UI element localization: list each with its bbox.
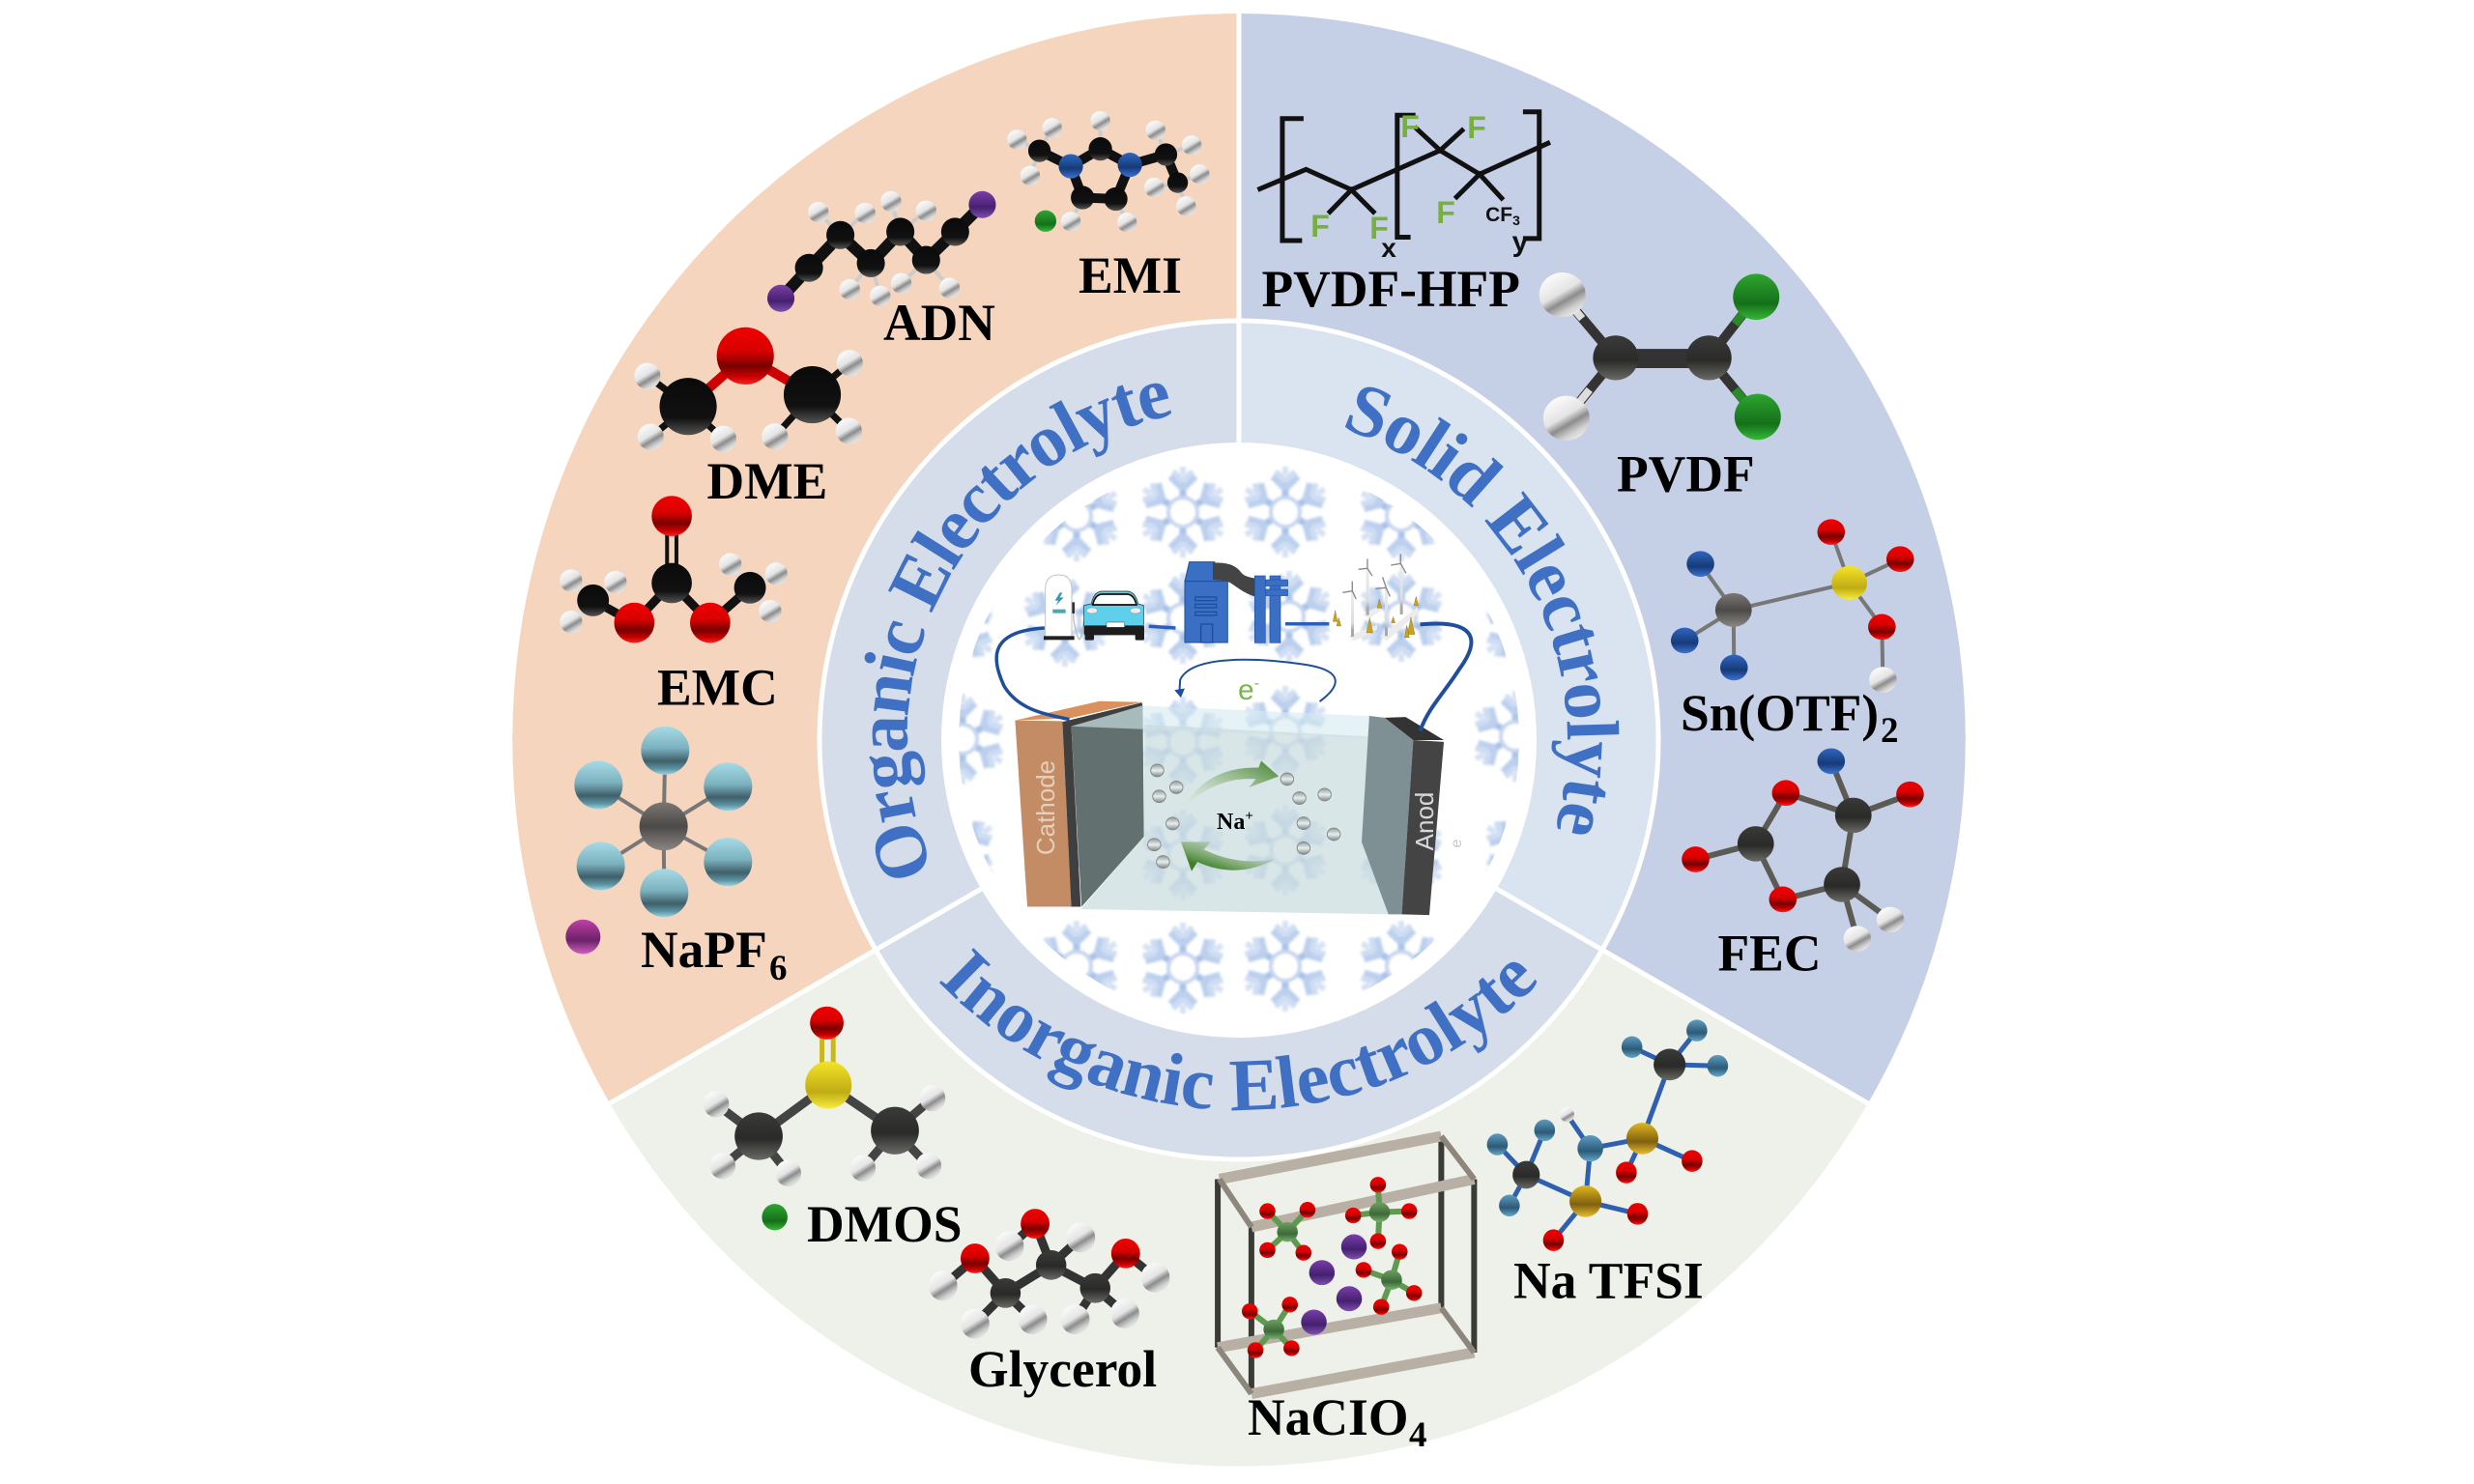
heading: Solid Electrolyte: Solid Electrolyte	[1345, 386, 1620, 835]
molecule: Glycerol: Glycerol	[968, 1340, 1157, 1398]
battery cell: e	[1238, 674, 1254, 706]
heading: Inorganic Electrolyte: Inorganic Electrolyte	[939, 948, 1537, 1111]
panel: inner ring inorganic electrolyte	[879, 891, 1598, 1157]
molecule: Glycerol	[929, 1209, 1169, 1398]
battery cell: -	[1254, 675, 1259, 692]
battery cell: Na	[1217, 810, 1245, 835]
molecule: Na TFSI	[1487, 1019, 1728, 1310]
molecule: Sn(OTF)2: Sn(OTF)	[1681, 684, 1879, 742]
molecule: NaPF6: 6	[769, 949, 787, 988]
molecule: NaPF6	[565, 727, 787, 988]
molecule: PVDF: PVDF	[1617, 445, 1755, 503]
Na ions	[1148, 764, 1340, 869]
molecule: PVDF-HFP structure: F	[1436, 195, 1455, 230]
molecule: PVDF-HFP structure: 3	[1512, 213, 1520, 228]
panel: inner ring organic electrolyte	[821, 323, 1237, 947]
heading: Organic Electrolyte: Organic Electrolyte	[864, 383, 1171, 878]
molecule: FEC	[1682, 748, 1924, 982]
molecule: PVDF-HFP structure: y	[1512, 226, 1529, 258]
battery cell	[1015, 674, 1465, 915]
battery cell: e	[1449, 839, 1465, 847]
wires and electron arrow	[996, 624, 1471, 730]
molecule: EMC	[560, 496, 788, 717]
label: PVDF-HFP: PVDF-HFP	[1262, 260, 1520, 318]
battery cell: Cathode	[1031, 760, 1060, 855]
panel: inner ring solid electrolyte	[1241, 323, 1656, 947]
panel: organic electrolyte sector	[512, 14, 1239, 1103]
molecule: DME	[634, 328, 863, 510]
panel: central battery illustration	[941, 442, 1537, 1038]
molecule: NaClO4 crystal: 4	[1409, 1415, 1426, 1455]
molecule: PVDF-HFP structure: F	[1369, 211, 1389, 245]
molecule: PVDF-HFP structure: F	[1400, 109, 1420, 144]
molecule: PVDF	[1539, 272, 1781, 503]
panel: inorganic electrolyte sector	[610, 740, 1868, 1467]
molecule: ADN: ADN	[883, 294, 995, 352]
molecule: PVDF-HFP structure: x	[1381, 233, 1396, 263]
arrow: ion flow to cathode	[1181, 842, 1275, 871]
molecule: PVDF-HFP structure: CF	[1485, 204, 1512, 226]
icon: charging station and car	[1044, 575, 1144, 641]
molecule: Sn(OTF)2	[1671, 519, 1914, 751]
molecule: PVDF-HFP structure	[1257, 109, 1550, 318]
icon: wind turbines	[1333, 554, 1419, 641]
molecule: EMI: EMI	[1079, 246, 1182, 304]
molecule: EMI	[1007, 111, 1210, 304]
arrow: ion flow to anode	[1182, 760, 1279, 809]
panel: solid electrolyte sector	[1239, 14, 1966, 1103]
molecule: PVDF-HFP structure: F	[1310, 209, 1330, 243]
icon: power plant	[1185, 562, 1288, 642]
molecule: FEC: FEC	[1718, 924, 1821, 982]
molecule: NaPF6: NaPF	[641, 921, 767, 979]
snowflake background pattern	[959, 466, 1519, 1014]
molecule: ADN	[767, 191, 996, 352]
molecule: NaClO4 crystal: NaCIO	[1248, 1388, 1408, 1446]
molecule: Sn(OTF)2: 2	[1881, 711, 1898, 751]
molecule: NaClO4 crystal	[1218, 1136, 1474, 1455]
molecule: DMOS	[704, 1007, 963, 1253]
molecule: Na TFSI: Na TFSI	[1513, 1252, 1704, 1310]
molecule: DME: DME	[707, 452, 827, 510]
battery cell: +	[1245, 809, 1253, 824]
battery cell: Anod	[1410, 792, 1439, 850]
molecule: PVDF-HFP structure: F	[1467, 110, 1486, 145]
molecule: EMC: EMC	[657, 659, 778, 717]
molecule: DMOS: DMOS	[807, 1195, 963, 1253]
